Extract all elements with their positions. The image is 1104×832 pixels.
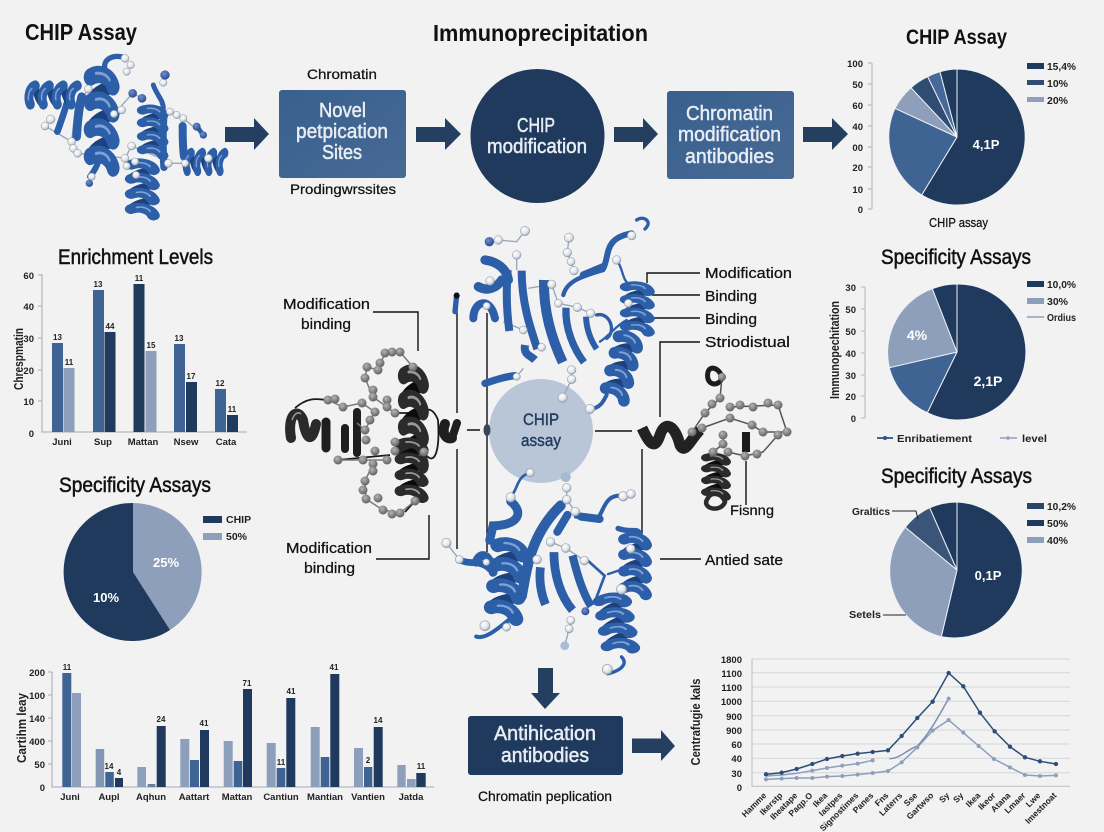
panel: Specificity Assays pie upper right: Specificity Assays	[881, 246, 1031, 269]
panel: line chart bottom right: Sy	[937, 790, 952, 805]
panel: CHIP Assay pie chart: 60	[852, 101, 863, 112]
panel: Enrichment Levels bar chart: 13	[175, 334, 184, 343]
panel: line chart bottom right: Paqp.O	[786, 790, 815, 818]
panel: line chart bottom right: Gartwso	[904, 790, 935, 821]
panel: Specificity Assays pie upper right: 30	[845, 371, 856, 382]
panel: line chart bottom right: Panes	[851, 790, 876, 815]
panel: line chart bottom right: Laterrs	[877, 790, 905, 818]
panel: Specificity Assays pie upper right: 30%	[1047, 296, 1069, 308]
label: Chromatin: Chromatin	[307, 66, 377, 82]
panel: line chart bottom right: Fns	[873, 790, 891, 808]
box: Novel peptication Sites: Sites	[322, 142, 362, 164]
panel: Specificity Assays pie lower right: 10,2%	[1047, 501, 1077, 513]
panel: Enrichment Levels bar chart: 13	[53, 333, 62, 342]
panel: line chart bottom right: 1100	[721, 669, 742, 680]
box: Antihication antibodies	[468, 716, 623, 775]
panel: grouped bar chart bottom left: 41	[330, 663, 339, 672]
panel: Enrichment Levels bar chart: Mattan	[128, 437, 158, 448]
panel: grouped bar chart bottom left: 2	[366, 756, 371, 765]
circle: CHIP assay center	[489, 379, 593, 483]
panel: CHIP Assay pie chart: 10	[852, 185, 863, 196]
panel: line chart bottom right: Lmaer	[1002, 790, 1028, 815]
panel: Specificity Assays pie left: 25%	[153, 555, 179, 570]
panel: line chart bottom right: 1000	[721, 697, 742, 708]
panel: CHIP Assay pie chart: 4,1P	[973, 137, 1000, 152]
label: Fisnng: Fisnng	[730, 502, 774, 518]
panel: Enrichment Levels bar chart: 10	[23, 397, 34, 408]
panel: grouped bar chart bottom left: 11	[417, 762, 426, 771]
panel: Specificity Assays pie upper right: Enribatiement	[897, 433, 973, 445]
panel: Enrichment Levels bar chart: 20	[23, 366, 34, 377]
panel: grouped bar chart bottom left: Mantian	[307, 792, 343, 803]
panel: grouped bar chart bottom left: 4	[117, 768, 122, 777]
panel: grouped bar chart bottom left: 400	[29, 737, 45, 748]
panel: Specificity Assays pie lower right: Setels	[849, 609, 881, 621]
label: Antied sate: Antied sate	[705, 552, 783, 569]
panel: Specificity Assays pie lower right	[849, 465, 1077, 638]
panel: line chart bottom right: 60	[731, 740, 742, 751]
panel: grouped bar chart bottom left: Jatda	[399, 792, 424, 803]
panel: grouped bar chart bottom left: Cartihm leay	[15, 693, 29, 763]
label: Modification binding lower left	[286, 540, 372, 577]
label: Modification binding upper left	[283, 296, 370, 333]
panel: Specificity Assays pie upper right: level	[1022, 433, 1047, 445]
panel: Specificity Assays pie upper right: Immunopechitation	[828, 301, 842, 399]
panel: Enrichment Levels bar chart: 40	[23, 302, 34, 313]
panel: grouped bar chart bottom left: 41	[287, 687, 296, 696]
panel: Specificity Assays pie upper right: Ordius	[1047, 312, 1076, 324]
leader lines and central connectors	[373, 273, 746, 559]
panel: Specificity Assays pie upper right: 10,0%	[1047, 279, 1077, 291]
panel: line chart bottom right: Centrafugie kals	[689, 678, 703, 766]
labels: right side protein callouts	[705, 265, 792, 351]
panel: line chart bottom right: Iastpes	[817, 790, 845, 818]
panel: grouped bar chart bottom left: 14	[105, 762, 114, 771]
panel: Enrichment Levels bar chart: 15	[147, 341, 156, 350]
panel: Specificity Assays pie upper right: 2,1P	[974, 373, 1002, 389]
panel: Enrichment Levels bar chart: 11	[65, 358, 74, 367]
label: Modification binding lower left: Modification	[286, 540, 372, 557]
panel: Enrichment Levels bar chart: Sup	[94, 437, 112, 448]
panel: CHIP Assay pie chart: 50	[852, 80, 863, 91]
panel: Specificity Assays pie left	[59, 474, 251, 641]
panel: grouped bar chart bottom left: 140	[29, 714, 45, 725]
box: Novel peptication Sites: petpication	[296, 121, 388, 143]
panel: line chart bottom right: 900	[726, 712, 742, 723]
panel: line chart bottom right: 40	[731, 754, 742, 765]
panel: CHIP Assay pie chart: CHIP Assay	[906, 26, 1007, 49]
arrow: antibodies to pie	[803, 118, 848, 150]
panel: line chart bottom right: Iheatape	[768, 790, 800, 822]
label: Modification binding lower left: binding	[304, 560, 355, 577]
panel: grouped bar chart bottom left: 14	[374, 716, 383, 725]
panel: CHIP Assay pie chart: 100	[847, 59, 863, 70]
panel: Specificity Assays pie left: Specificity Assays	[59, 474, 211, 497]
panel: Enrichment Levels bar chart: 17	[187, 372, 196, 381]
circle: CHIP modification: CHIP	[517, 115, 555, 137]
panel: Enrichment Levels bar chart: 11	[228, 405, 237, 414]
circle: CHIP assay center: CHIP	[523, 410, 559, 429]
panel: grouped bar chart bottom left: 24	[157, 715, 166, 724]
panel: grouped bar chart bottom left: Vantien	[351, 792, 385, 803]
panel: grouped bar chart bottom left: 50	[34, 760, 45, 771]
icon: black protein right	[642, 368, 792, 509]
panel: Enrichment Levels bar chart: 44	[106, 322, 115, 331]
panel: line chart bottom right: 1800	[721, 655, 742, 666]
panel: Specificity Assays pie upper right: 0	[851, 414, 856, 425]
panel: line chart bottom right: Ikea	[811, 790, 830, 809]
panel: CHIP Assay pie chart: CHIP assay	[929, 216, 989, 230]
panel: Specificity Assays pie lower right: 0,1P	[975, 568, 1002, 583]
panel: line chart bottom right: Signostimes	[818, 790, 861, 832]
panel: line chart bottom right: 1100	[721, 683, 742, 694]
panel: grouped bar chart bottom left: 11	[63, 663, 72, 672]
panel: CHIP Assay pie chart	[847, 26, 1077, 230]
panel: CHIP Assay pie chart: 10%	[1047, 78, 1069, 90]
panel: CHIP Assay pie chart: 20%	[1047, 95, 1069, 107]
panel: grouped bar chart bottom left: Cantiun	[263, 792, 299, 803]
panel: Enrichment Levels bar chart	[12, 246, 247, 448]
panel: Specificity Assays pie lower right: 50%	[1047, 518, 1069, 530]
icon: blue protein top left	[28, 54, 225, 216]
panel: Specificity Assays pie upper right	[828, 246, 1077, 445]
panel: line chart bottom right: Ikeor	[976, 790, 998, 812]
labels: right side protein callouts: Striodistual	[705, 334, 790, 351]
icon: blue protein bottom center	[442, 469, 646, 674]
label: Modification binding upper left: Modification	[283, 296, 370, 313]
panel: grouped bar chart bottom left: 41	[200, 719, 209, 728]
panel: line chart bottom right: 30	[731, 769, 742, 780]
panel: grouped bar chart bottom left: Aqhun	[136, 792, 166, 803]
panel: Enrichment Levels bar chart: Nsew	[174, 437, 199, 448]
circle: CHIP assay center: assay	[521, 431, 561, 450]
panel: grouped bar chart bottom left: Aupl	[98, 792, 120, 803]
title: Immunoprecipitation: Immunoprecipitation	[433, 20, 648, 46]
box: Novel peptication Sites	[279, 90, 406, 178]
panel: grouped bar chart bottom left: 200	[29, 668, 45, 679]
panel: grouped bar chart bottom left: Mattan	[222, 792, 252, 803]
panel: grouped bar chart bottom left: 0	[40, 783, 45, 794]
panel: Enrichment Levels bar chart: 11	[135, 274, 144, 283]
panel: line chart bottom right: Sse	[902, 790, 920, 808]
panel: line chart bottom right	[689, 655, 1070, 832]
box: Chromatin modification antibodies: antibodies	[685, 146, 774, 168]
box: Antihication antibodies: Antihication	[494, 723, 596, 745]
circle: CHIP modification	[470, 69, 604, 203]
panel: Specificity Assays pie lower right: Graltics	[852, 506, 890, 518]
panel: CHIP Assay pie chart: 20	[852, 163, 863, 174]
box: Chromatin modification antibodies: modification	[678, 124, 781, 146]
panel: line chart bottom right: 0	[737, 783, 742, 794]
icon: black protein left	[290, 348, 490, 518]
panel: CHIP Assay pie chart: 00	[852, 143, 863, 154]
panel: grouped bar chart bottom left: 71	[243, 679, 252, 688]
arrow: CHIP modification to antibodies	[614, 118, 658, 150]
panel: Enrichment Levels bar chart: Chrespmatin	[12, 328, 26, 390]
panel: Specificity Assays pie lower right: Specificity Assays	[881, 465, 1032, 488]
icon: blue protein top center	[454, 218, 649, 414]
panel: Specificity Assays pie left: CHIP	[226, 514, 251, 526]
panel: CHIP Assay pie chart: 0	[858, 205, 863, 216]
arrow: protein down to antibodies	[531, 668, 560, 709]
panel: line chart bottom right: Sy	[951, 790, 966, 805]
labels: right side protein callouts: Modification	[705, 265, 792, 282]
labels: right side protein callouts: Binding	[705, 288, 757, 305]
panel: grouped bar chart bottom left: Juni	[60, 792, 80, 803]
panel: Enrichment Levels bar chart: 30	[23, 334, 34, 345]
arrow: protein to novel sites	[225, 118, 269, 150]
panel: line chart bottom right: Atana	[989, 790, 1013, 814]
panel: line chart bottom right: Ikerstp	[758, 790, 784, 817]
arrow: novel sites to CHIP modification	[416, 118, 461, 150]
box: Chromatin modification antibodies: Chromatin	[686, 103, 773, 125]
panel: Enrichment Levels bar chart: 12	[216, 379, 225, 388]
panel: Specificity Assays pie lower right: 40%	[1047, 535, 1069, 547]
panel: line chart bottom right: 900	[726, 726, 742, 737]
arrow: antibodies to line chart	[632, 730, 675, 761]
panel: Specificity Assays pie upper right: 50	[845, 327, 856, 338]
panel: Specificity Assays pie upper right: 4%	[907, 327, 928, 343]
panel: Specificity Assays pie left: 10%	[93, 590, 119, 605]
panel: Enrichment Levels bar chart: Juni	[52, 437, 72, 448]
panel: grouped bar chart bottom left: Aattart	[179, 792, 210, 803]
panel: Enrichment Levels bar chart: 0	[29, 429, 34, 440]
panel: Enrichment Levels bar chart: 60	[23, 271, 34, 282]
panel: Specificity Assays pie left: 50%	[226, 531, 248, 543]
panel: Enrichment Levels bar chart: Cata	[216, 437, 237, 448]
label: Prodingwrssites: Prodingwrssites	[290, 181, 396, 197]
panel: line chart bottom right: Imestnoat	[1023, 790, 1059, 826]
panel: Enrichment Levels bar chart: 13	[94, 280, 103, 289]
panel: Specificity Assays pie upper right: 40	[845, 349, 856, 360]
title: CHIP Assay top left: CHIP Assay	[25, 19, 137, 45]
panel: CHIP Assay pie chart: 40	[852, 122, 863, 133]
panel: line chart bottom right: Hamme	[740, 790, 769, 819]
label: Chromatin peplication: Chromatin peplication	[478, 788, 612, 804]
panel: line chart bottom right: Lwe	[1024, 790, 1043, 809]
circle: CHIP modification: modification	[487, 136, 587, 158]
panel: Enrichment Levels bar chart: Enrichment Levels	[58, 246, 213, 269]
panel: Specificity Assays pie upper right: 20	[845, 392, 856, 403]
panel: Specificity Assays pie upper right: 50	[845, 305, 856, 316]
box: Antihication antibodies: antibodies	[501, 745, 589, 767]
label: Modification binding upper left: binding	[301, 316, 351, 333]
panel: CHIP Assay pie chart: 15,4%	[1047, 61, 1077, 73]
labels: right side protein callouts: Binding	[705, 311, 757, 328]
box: Chromatin modification antibodies	[667, 91, 794, 179]
panel: grouped bar chart bottom left: 100	[29, 691, 45, 702]
panel: line chart bottom right: Ikea	[964, 790, 983, 809]
panel: grouped bar chart bottom left: 11	[277, 758, 286, 767]
panel: grouped bar chart bottom left	[15, 663, 434, 803]
panel: Specificity Assays pie upper right: 30	[845, 283, 856, 294]
box: Novel peptication Sites: Novel	[319, 100, 366, 122]
